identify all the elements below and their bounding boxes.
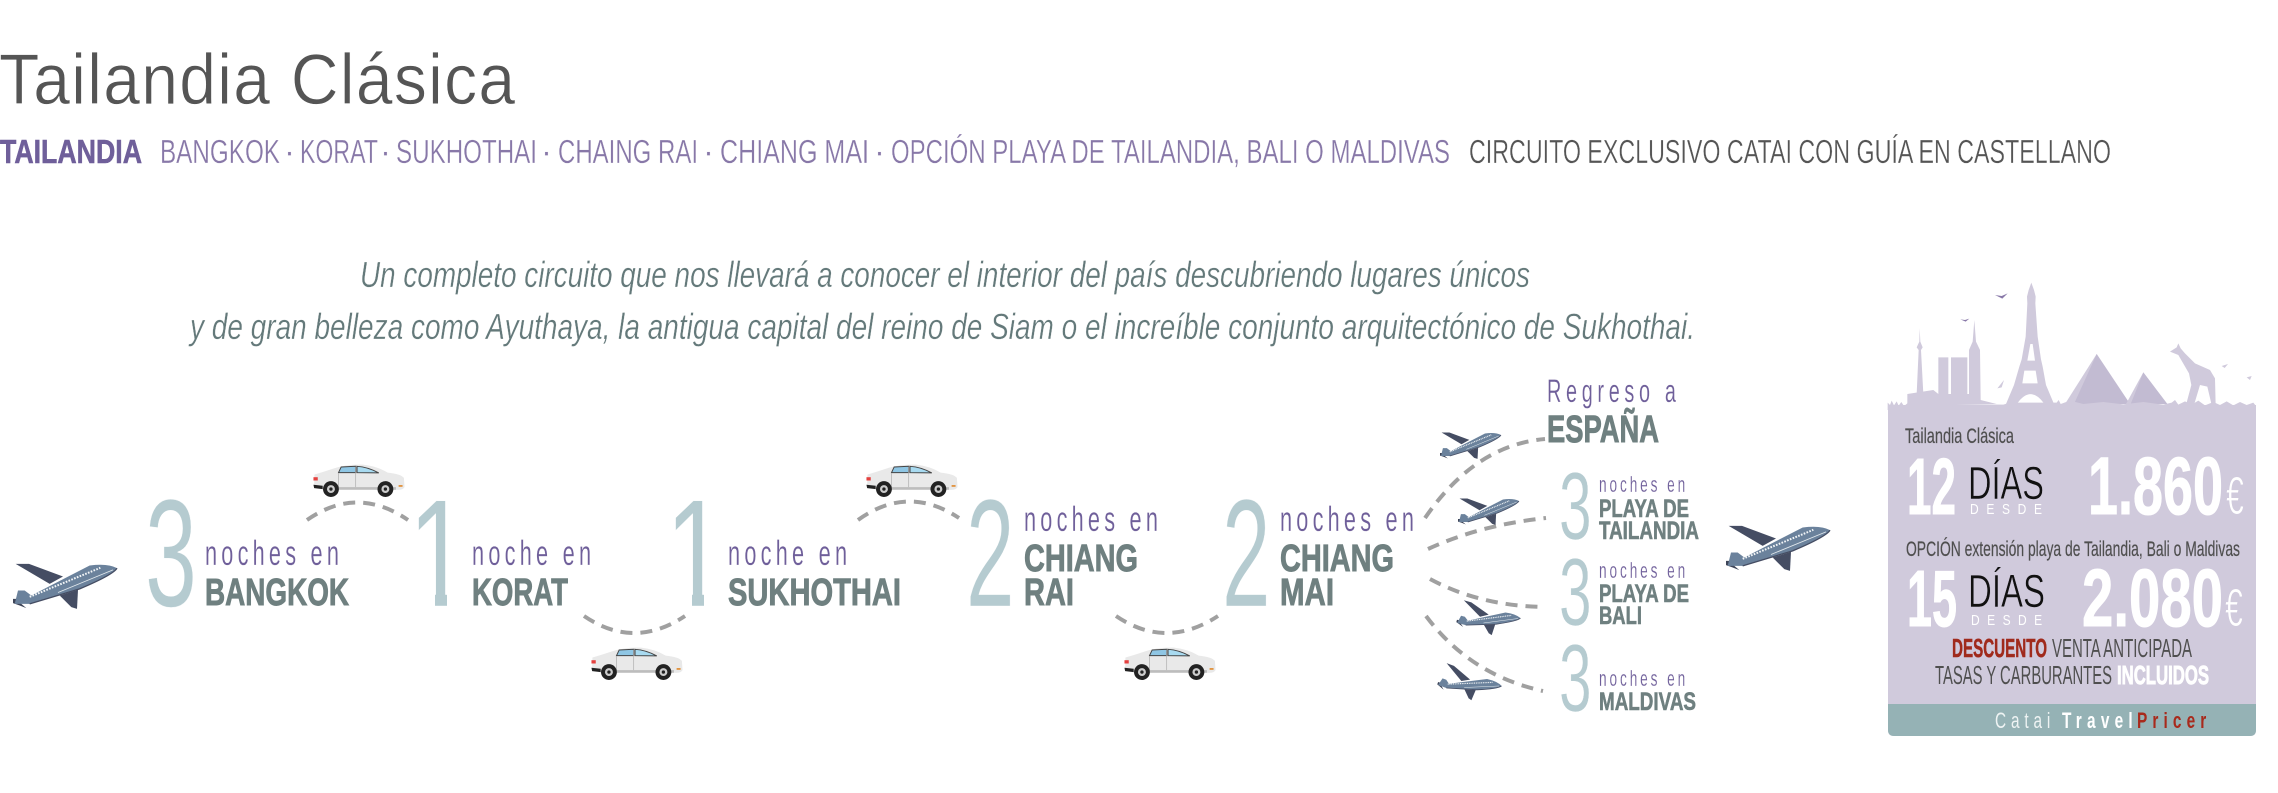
city name: SUKHOTHAI [728,572,901,614]
stop: Sukhothai [676,501,900,606]
icon: car [591,648,683,680]
option: Maldives [1559,624,1696,732]
destination: ESPAÑA [1547,407,1659,451]
number: 3 [145,467,197,639]
return label: Regreso a [1547,373,1676,409]
stop: Korat [418,501,590,606]
option: Thai beach: TAILANDIA [1599,517,1699,545]
nights label: noches en [1599,558,1685,583]
route cities: · [380,133,391,170]
euro sign: € [2226,466,2244,526]
route cities: OPCIÓN PLAYA DE TAILANDIA, BALI O MALDIVAS [891,133,1450,170]
footer brand: Catai [1995,709,2050,734]
route cities: · [284,133,295,170]
dashed route: Sukhothai to Chiang Rai [858,501,959,520]
footer brand: Travel [2062,709,2133,734]
route cities: CHIANG MAI [720,133,869,170]
footer brand: Pricer [2137,709,2207,734]
nights label: noches en [1280,501,1414,539]
footer brand [1995,709,2207,734]
place: PLAYA DE [1599,495,1689,523]
icon: car [866,465,958,497]
number: 3 [1559,538,1592,646]
place: MALDIVAS [1599,688,1696,716]
nights label: noches en [205,535,339,573]
intro text: y de gran belleza como Ayuthaya, la antigua capital del reino de Siam o el increíble conjunto arquitectónico de Sukhothai. [188,306,1695,347]
footer band [1888,704,2256,736]
country name: TAILANDIA [0,133,142,170]
taxes line: TASAS Y CARBURANTES [1935,660,2112,690]
icon: arrival plane [13,564,117,609]
route cities: SUKHOTHAI [396,133,537,170]
option: Bali: BALI [1599,602,1642,630]
nights label: noches en [1599,666,1685,691]
number: 1 [408,468,469,639]
stop: Chiang Mai: MAI [1280,572,1334,614]
from label: DESDE [1971,612,2042,628]
number: 1 [665,468,726,639]
from label: DESDE [1970,501,2042,517]
skyline silhouette [1888,283,2256,410]
nights label: noche en [728,535,847,573]
stop: Chiang Rai [966,468,1158,639]
city name: CHIANG [1024,538,1138,580]
stop: Bangkok [145,467,349,639]
package name: Tailandia Clásica [1905,425,2014,448]
stop: Chiang Rai: RAI [1024,572,1074,614]
route cities: · [703,133,714,170]
option: Bali [1559,538,1689,646]
discount line [1952,633,2192,663]
intro text [188,254,1695,347]
price panel [1888,283,2256,736]
icon: plane to Thai beach [1458,498,1519,525]
route cities: CHAING RAI [558,133,698,170]
icon: plane to Bali [1455,600,1521,641]
city name: CHIANG [1280,538,1394,580]
option: Thai beach [1559,452,1699,560]
subtitle: destination line [0,133,2111,170]
number: 2 [966,468,1014,639]
stop: Chiang Mai [1222,468,1414,639]
icon: car [1124,648,1216,680]
days: 15: 15 [1907,554,1957,643]
panel body [1888,405,2256,736]
icon: return plane [1726,526,1830,571]
number: 3 [1559,624,1592,732]
route cities: BANGKOK [160,133,280,170]
nights label: noche en [472,535,591,573]
days label: DÍAS [1968,565,2045,617]
euro sign: € [2225,578,2243,638]
icon: plane to Maldives [1436,663,1502,708]
dashed routes: Chiang Mai to destinations [1425,439,1546,691]
title: Tailandia Clásica [0,40,516,120]
intro text: Un completo circuito que nos llevará a conocer el interior del país descubriendo lugares únicos [360,254,1530,295]
place: PLAYA DE [1599,580,1689,608]
days: 12: 12 [1907,442,1956,531]
icon: plane to Spain [1440,432,1501,459]
days label: DÍAS [1968,457,2044,509]
icon: car [313,465,405,497]
discount line: DESCUENTO [1952,633,2047,663]
nights label: noches en [1024,501,1158,539]
city name: BANGKOK [205,572,349,614]
number: 3 [1559,452,1592,560]
dashed route: Korat to Sukhothai [584,616,685,633]
dashed route: Chiang Rai to Chiang Mai [1116,616,1218,633]
route cities: · [541,133,552,170]
nights label: noches en [1599,472,1685,497]
route cities [160,133,1450,170]
taxes line: INCLUIDOS [2117,660,2209,690]
return to Spain [1547,373,1676,451]
number: 2 [1222,468,1270,639]
city name: KORAT [472,572,568,614]
route cities: KORAT [300,133,378,170]
dashed route: Bangkok to Korat [307,502,408,520]
route cities: · [874,133,885,170]
